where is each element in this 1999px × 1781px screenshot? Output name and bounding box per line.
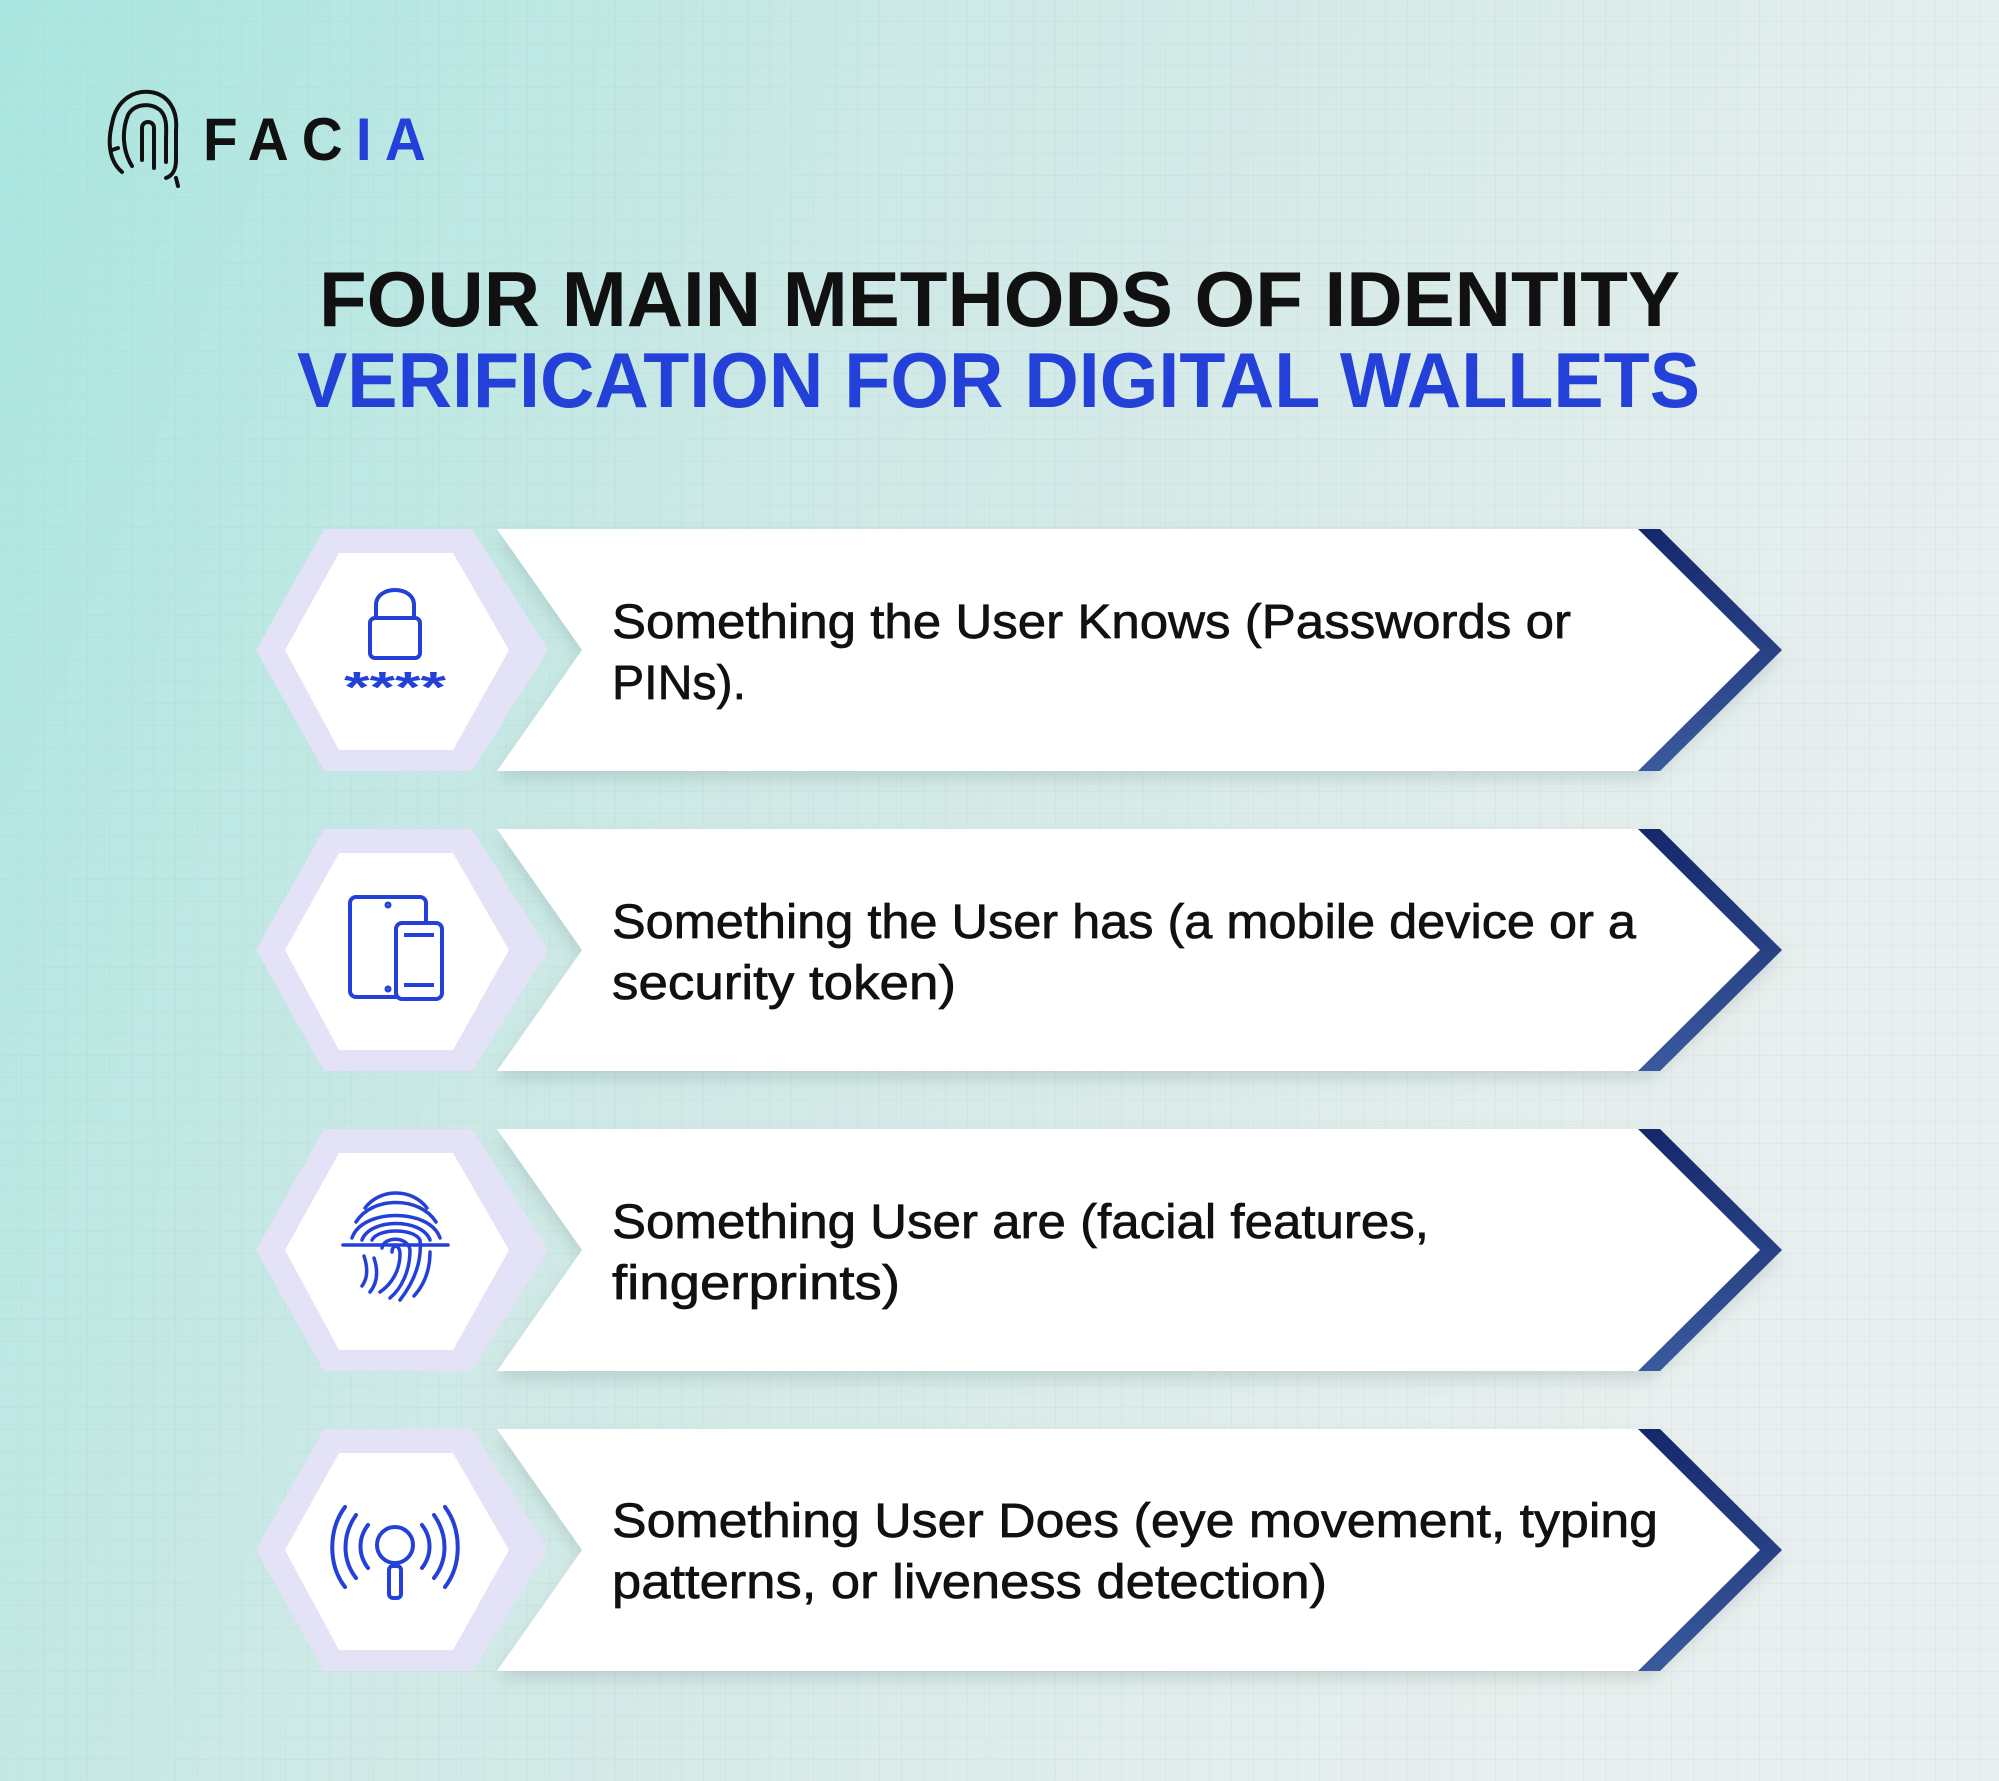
icon: signal sensor: [332, 1507, 458, 1598]
icon: lock with asterisks: [344, 590, 447, 712]
panel: row 4 behavior: [256, 1429, 1782, 1671]
title: VERIFICATION FOR DIGITAL WALLETS: [297, 336, 1700, 424]
panel: row 2 device: [256, 829, 1782, 1071]
icon: lock with asterisks: ****: [344, 663, 447, 712]
title: [297, 255, 1700, 424]
logo text: FACIA: [203, 106, 439, 173]
panel: row 3 biometrics: [256, 1129, 1782, 1371]
logo: [110, 92, 439, 186]
text: row 2: security token): [612, 957, 956, 1010]
text: row 4: patterns, or liveness detection): [612, 1556, 1327, 1609]
text: row 3: Something User are (facial features,: [612, 1196, 1429, 1249]
icon: tablet and phone: [350, 897, 442, 999]
text: row 4: Something User Does (eye movement, typing: [612, 1495, 1658, 1548]
panel: row 1 passwords: [256, 529, 1782, 771]
text: row 3: fingerprints): [612, 1257, 900, 1310]
text: row 1: Something the User Knows (Passwords or: [612, 596, 1571, 649]
title: FOUR MAIN METHODS OF IDENTITY: [319, 255, 1680, 343]
icon: fingerprint: [343, 1193, 448, 1300]
text: row 1: PINs).: [612, 657, 746, 710]
icon: fingerprint head logo: [110, 92, 178, 186]
text: row 2: Something the User has (a mobile device or a: [612, 896, 1636, 949]
